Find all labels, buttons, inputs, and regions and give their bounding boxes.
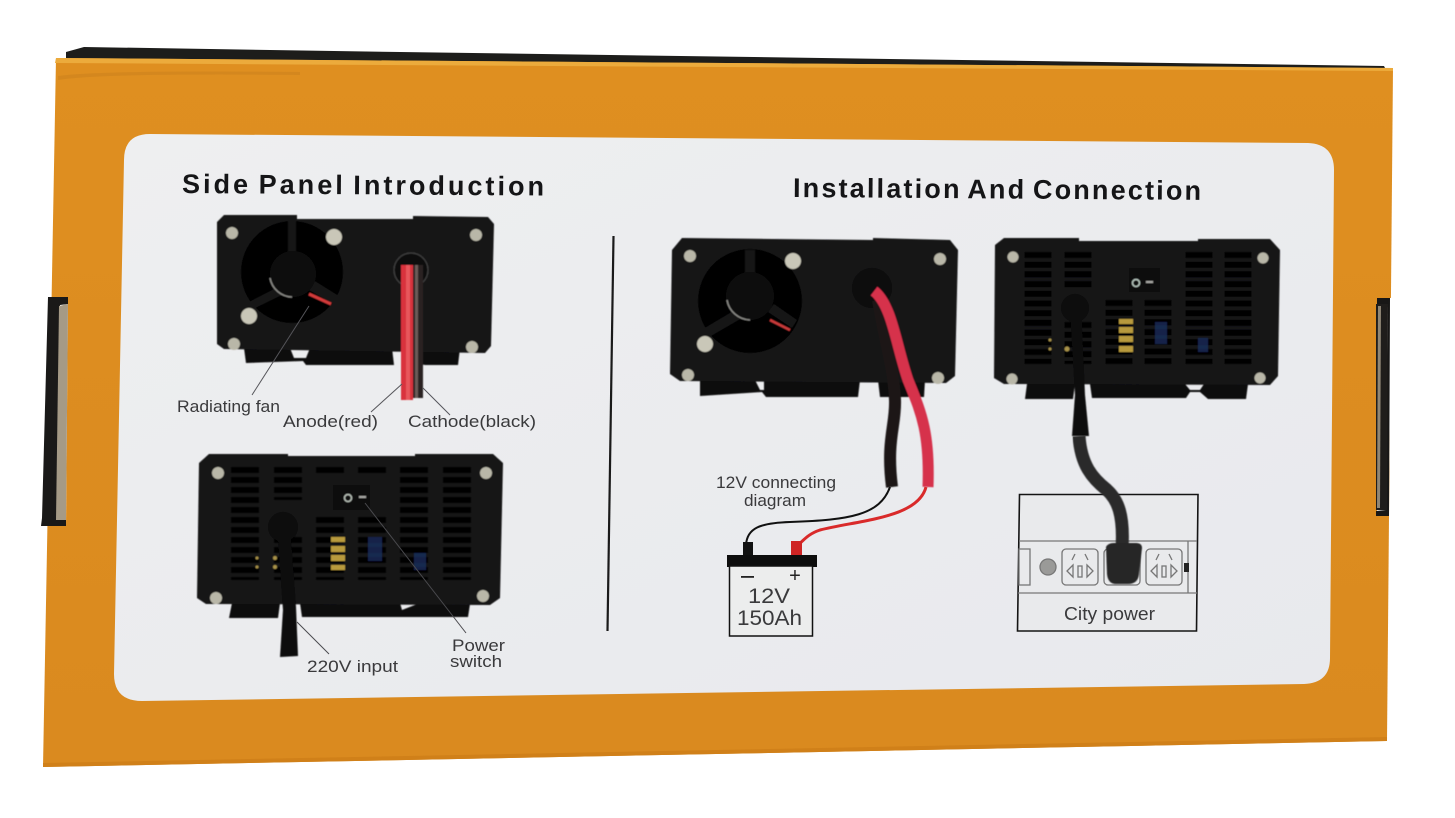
- box top dark edge: [66, 47, 1386, 70]
- white label panel: [114, 134, 1334, 701]
- label: power switch: switch: [450, 652, 502, 671]
- power cord and plug: [1079, 436, 1142, 584]
- panel: side panel introduction, fan side: [177, 215, 536, 431]
- leader lines: [252, 306, 450, 415]
- icon: 12V 150Ah battery: [727, 541, 817, 636]
- right side tab slot: [1376, 298, 1393, 516]
- divider: [608, 236, 614, 631]
- label: 12V connecting diagram: 12V connecting: [716, 473, 836, 492]
- label: city power: City power: [1064, 604, 1155, 624]
- label: 12V connecting diagram: diagram: [744, 491, 806, 510]
- label: anode: Anode(red): [283, 412, 378, 431]
- label: radiating fan: Radiating fan: [177, 397, 280, 416]
- inverter input side with power cord: [994, 238, 1280, 436]
- city power socket strip: [1018, 494, 1198, 631]
- icon: 12V 150Ah battery: 12V: [748, 585, 790, 608]
- icon: 12V 150Ah battery: 150Ah: [737, 607, 802, 630]
- heading: Installation And Connection: Installation And Connection: [793, 173, 1201, 206]
- left side tab slot: [41, 297, 68, 526]
- leader lines: [297, 503, 466, 654]
- label: 220V input: 220V input: [307, 657, 398, 676]
- thin battery wires: [746, 487, 926, 545]
- panel: 12V battery connection: [670, 238, 958, 636]
- icon: 12V 150Ah battery: +: [789, 565, 801, 587]
- label: cathode: Cathode(black): [408, 412, 536, 431]
- label: power switch: Power: [452, 636, 505, 655]
- panel: city power connection: [994, 238, 1280, 631]
- inverter fan side photo: [217, 215, 494, 400]
- panel: side panel introduction, input side: [197, 454, 505, 676]
- heading: Side Panel Introduction: Side Panel Introduction: [182, 169, 544, 202]
- inverter fan side with battery cables: [670, 238, 958, 487]
- inverter input side photo: [197, 454, 503, 657]
